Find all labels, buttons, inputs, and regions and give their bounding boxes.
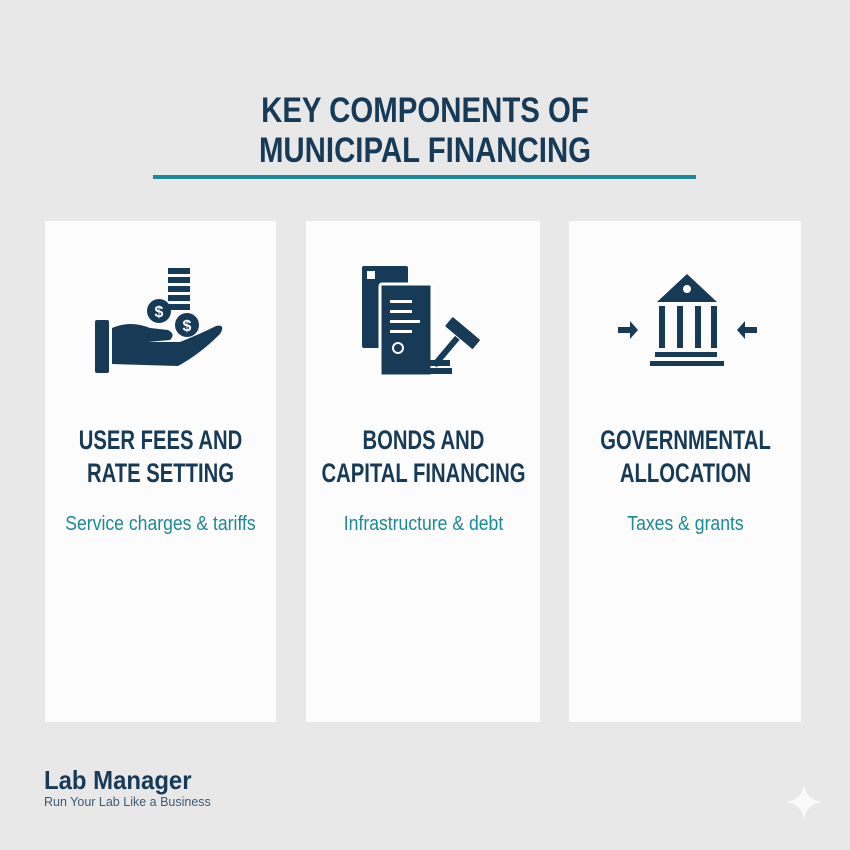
heading: user fees: RATE SETTING (87, 458, 234, 488)
icon: hand with coins: $ (155, 304, 164, 321)
icon: hand with coins (95, 268, 222, 373)
panel: governmental (569, 221, 801, 722)
panel: user fees (45, 221, 276, 722)
icon: sparkle (787, 785, 821, 819)
icon: bond documents and gavel (362, 266, 480, 374)
heading: governmental: GOVERNMENTAL (600, 425, 771, 455)
heading: bonds (322, 425, 526, 488)
title: MUNICIPAL FINANCING (259, 131, 591, 170)
subtitle: governmental: Taxes & grants (627, 513, 744, 535)
title (259, 91, 591, 170)
icon: government building with arrows (618, 274, 757, 366)
heading: governmental (600, 425, 771, 488)
icon: hand with coins: $ (183, 318, 192, 335)
subtitle: bonds: Infrastructure & debt (344, 513, 503, 535)
title underline (153, 175, 696, 179)
logo: Lab Manager (44, 765, 211, 809)
logo: Lab Manager: Lab Manager (44, 765, 192, 795)
panel: bonds (306, 221, 540, 722)
title: KEY COMPONENTS OF (261, 91, 589, 130)
subtitle: user fees: Service charges & tariffs (65, 513, 256, 535)
heading: user fees (79, 425, 242, 488)
logo: Lab Manager: Run Your Lab Like a Business (44, 795, 211, 809)
heading: user fees: USER FEES AND (79, 425, 242, 455)
heading: bonds: BONDS AND (363, 425, 484, 455)
heading: governmental: ALLOCATION (620, 458, 751, 488)
heading: bonds: CAPITAL FINANCING (322, 458, 526, 488)
